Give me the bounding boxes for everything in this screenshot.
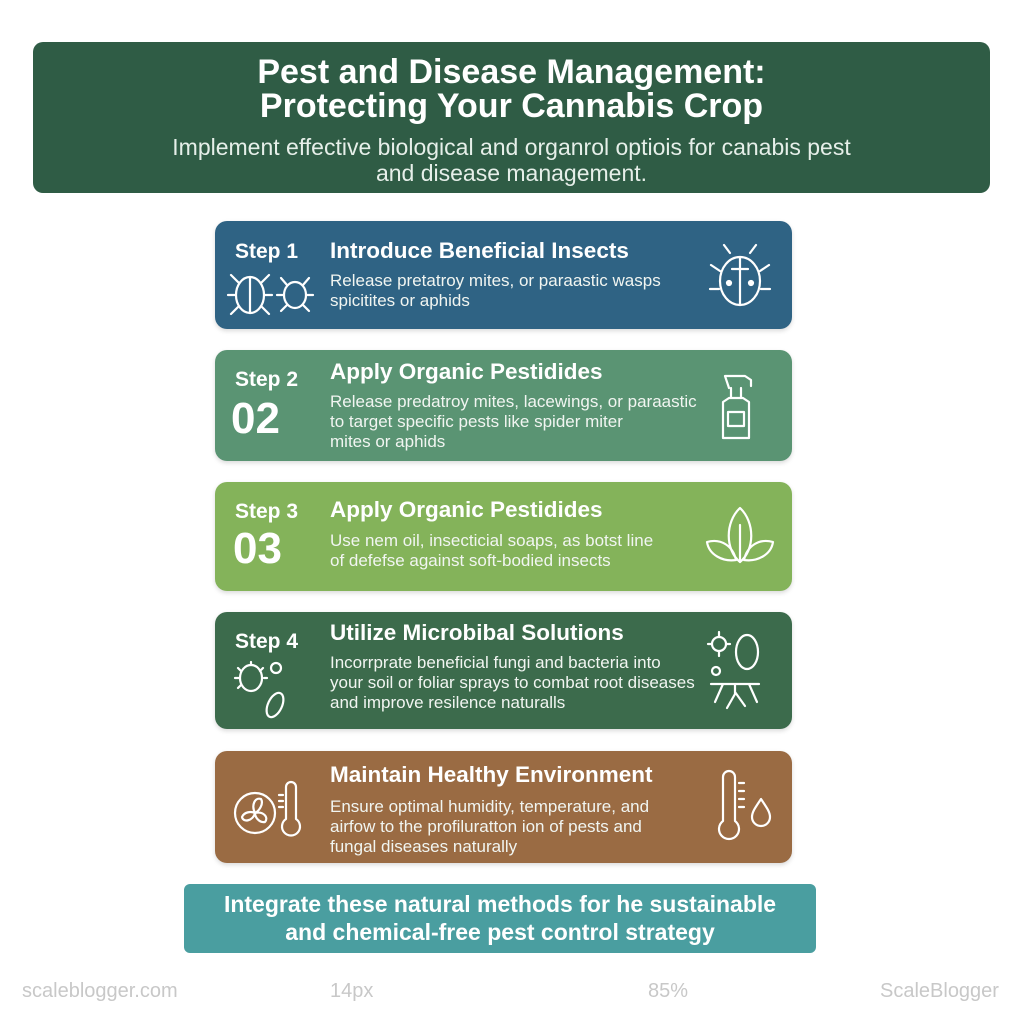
panel: step 3 bbox=[215, 482, 792, 591]
body: and improve resilence naturalls bbox=[330, 693, 565, 712]
step label 2: 02 bbox=[231, 394, 280, 443]
body: fungal diseases naturally bbox=[330, 837, 517, 856]
body: mites or aphids bbox=[330, 432, 445, 451]
step label 3 bbox=[233, 500, 298, 573]
title: Pest and Disease Management: bbox=[257, 53, 766, 91]
panel: step 5 bbox=[215, 751, 792, 863]
step label 2: Step 2 bbox=[235, 368, 298, 391]
icon: thermometer and drop bbox=[718, 770, 772, 840]
subtitle: Implement effective biological and organrol optiois for canabis pest bbox=[172, 134, 851, 160]
heading: Utilize Microbibal Solutions bbox=[330, 620, 624, 645]
title: Protecting Your Cannabis Crop bbox=[260, 87, 763, 125]
icon: fan and thermometer bbox=[234, 780, 302, 837]
body: Ensure optimal humidity, temperature, and bbox=[330, 797, 649, 816]
step label 2 bbox=[231, 368, 298, 443]
callout: conclusion: Integrate these natural methods for he sustainable bbox=[224, 891, 776, 917]
body: to target specific pests like spider miter bbox=[330, 412, 623, 431]
body bbox=[330, 392, 697, 451]
panel: step 4 bbox=[215, 612, 792, 729]
footer pct: 85% bbox=[648, 980, 688, 1002]
heading: Introduce Beneficial Insects bbox=[330, 238, 629, 263]
panel: step 1 bbox=[215, 221, 792, 329]
body: your soil or foliar sprays to combat root diseases bbox=[330, 673, 695, 692]
body bbox=[330, 653, 695, 712]
icon: microbes bbox=[234, 660, 284, 718]
body: Release pretatroy mites, or paraastic wasps bbox=[330, 271, 661, 290]
footer left: scaleblogger.com bbox=[22, 980, 178, 1002]
body: Use nem oil, insecticial soaps, as botst line bbox=[330, 531, 653, 550]
heading: Apply Organic Pestidides bbox=[330, 497, 603, 522]
header bbox=[33, 42, 990, 193]
step label 3: 03 bbox=[233, 524, 282, 573]
step label 3: Step 3 bbox=[235, 500, 298, 523]
body bbox=[330, 797, 649, 856]
icon: insects bbox=[226, 274, 314, 316]
title bbox=[257, 53, 766, 125]
footer mid: 14px bbox=[330, 980, 373, 1002]
step label 4: Step 4 bbox=[235, 630, 298, 653]
body bbox=[330, 271, 661, 310]
icon: roots bbox=[706, 630, 760, 710]
subtitle: and disease management. bbox=[376, 160, 647, 186]
body bbox=[330, 531, 653, 570]
body: Incorrprate beneficial fungi and bacteria into bbox=[330, 653, 661, 672]
body: of defefse against soft-bodied insects bbox=[330, 551, 611, 570]
panel: step 2 bbox=[215, 350, 792, 461]
subtitle bbox=[172, 134, 851, 186]
icon: leaves bbox=[706, 506, 774, 564]
icon: spray bottle bbox=[722, 374, 752, 440]
callout: conclusion: and chemical-free pest control strategy bbox=[285, 919, 715, 945]
heading: Apply Organic Pestidides bbox=[330, 359, 603, 384]
body: Release predatroy mites, lacewings, or paraastic bbox=[330, 392, 697, 411]
body: airfow to the profiluratton ion of pests and bbox=[330, 817, 642, 836]
callout: conclusion bbox=[184, 884, 816, 953]
footer right: ScaleBlogger bbox=[880, 980, 999, 1002]
heading: Maintain Healthy Environment bbox=[330, 762, 653, 787]
step label 1: Step 1 bbox=[235, 240, 298, 263]
icon: ladybug bbox=[708, 244, 772, 306]
body: spicitites or aphids bbox=[330, 291, 470, 310]
